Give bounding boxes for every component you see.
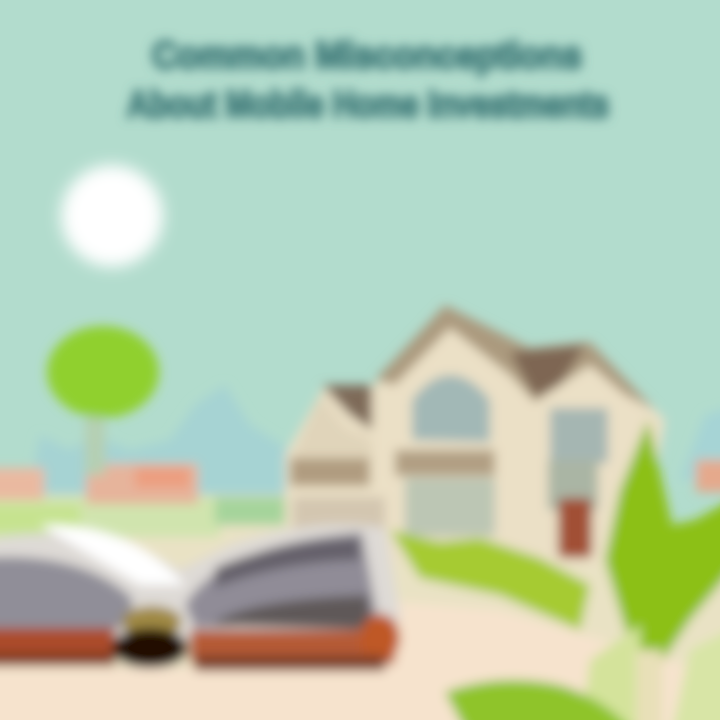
cover shadow left bbox=[0, 652, 115, 666]
left gable roof bbox=[322, 385, 372, 430]
book cover right bbox=[190, 630, 395, 664]
green meadow left bbox=[0, 497, 220, 537]
book left page block bbox=[0, 557, 132, 628]
house upper window bbox=[412, 375, 490, 442]
left wing wall bbox=[292, 395, 372, 460]
book white pages bbox=[0, 524, 400, 640]
title: About Mobile Home Investments bbox=[127, 84, 609, 126]
house body bbox=[285, 308, 665, 565]
house door bbox=[558, 498, 592, 558]
plant pale left bbox=[580, 625, 640, 720]
shrubs bbox=[390, 530, 590, 630]
house bbox=[285, 305, 665, 565]
storey band centre bbox=[395, 450, 495, 476]
distant houses bbox=[0, 460, 720, 504]
plant main leaf bbox=[605, 420, 720, 665]
title bbox=[127, 35, 609, 126]
cover corner bbox=[360, 614, 400, 662]
page highlight bbox=[40, 525, 185, 585]
plant pale right bbox=[670, 625, 720, 720]
low leaf bbox=[445, 680, 640, 720]
open book bbox=[0, 524, 400, 671]
book right page block bbox=[185, 532, 378, 628]
spine top bbox=[122, 606, 182, 638]
illustrated scene bbox=[0, 305, 720, 720]
right page dark band lower bbox=[212, 595, 372, 630]
plant stem bbox=[636, 650, 662, 720]
foreground plant bbox=[445, 420, 720, 720]
right page dark band upper bbox=[215, 538, 360, 588]
porch wall bbox=[293, 497, 385, 533]
house roof bbox=[375, 305, 655, 410]
house lower window bbox=[405, 478, 495, 536]
distant city skyline bbox=[25, 385, 290, 510]
tree bbox=[47, 326, 159, 475]
side lower window bbox=[548, 460, 598, 510]
green meadow patch bbox=[215, 497, 285, 525]
side window bbox=[550, 408, 608, 463]
storey band left bbox=[290, 458, 370, 486]
cover shadow right bbox=[195, 655, 385, 671]
book cover left bbox=[0, 628, 115, 664]
lime grass left bbox=[0, 505, 80, 533]
title: Common Misconceptions bbox=[152, 35, 582, 77]
spine hollow bbox=[112, 628, 188, 668]
ground band bbox=[0, 495, 720, 720]
sand path bbox=[0, 600, 720, 720]
far right skyline bbox=[680, 405, 720, 480]
roof dark gable bbox=[510, 345, 585, 398]
icon: sun bbox=[61, 165, 163, 267]
